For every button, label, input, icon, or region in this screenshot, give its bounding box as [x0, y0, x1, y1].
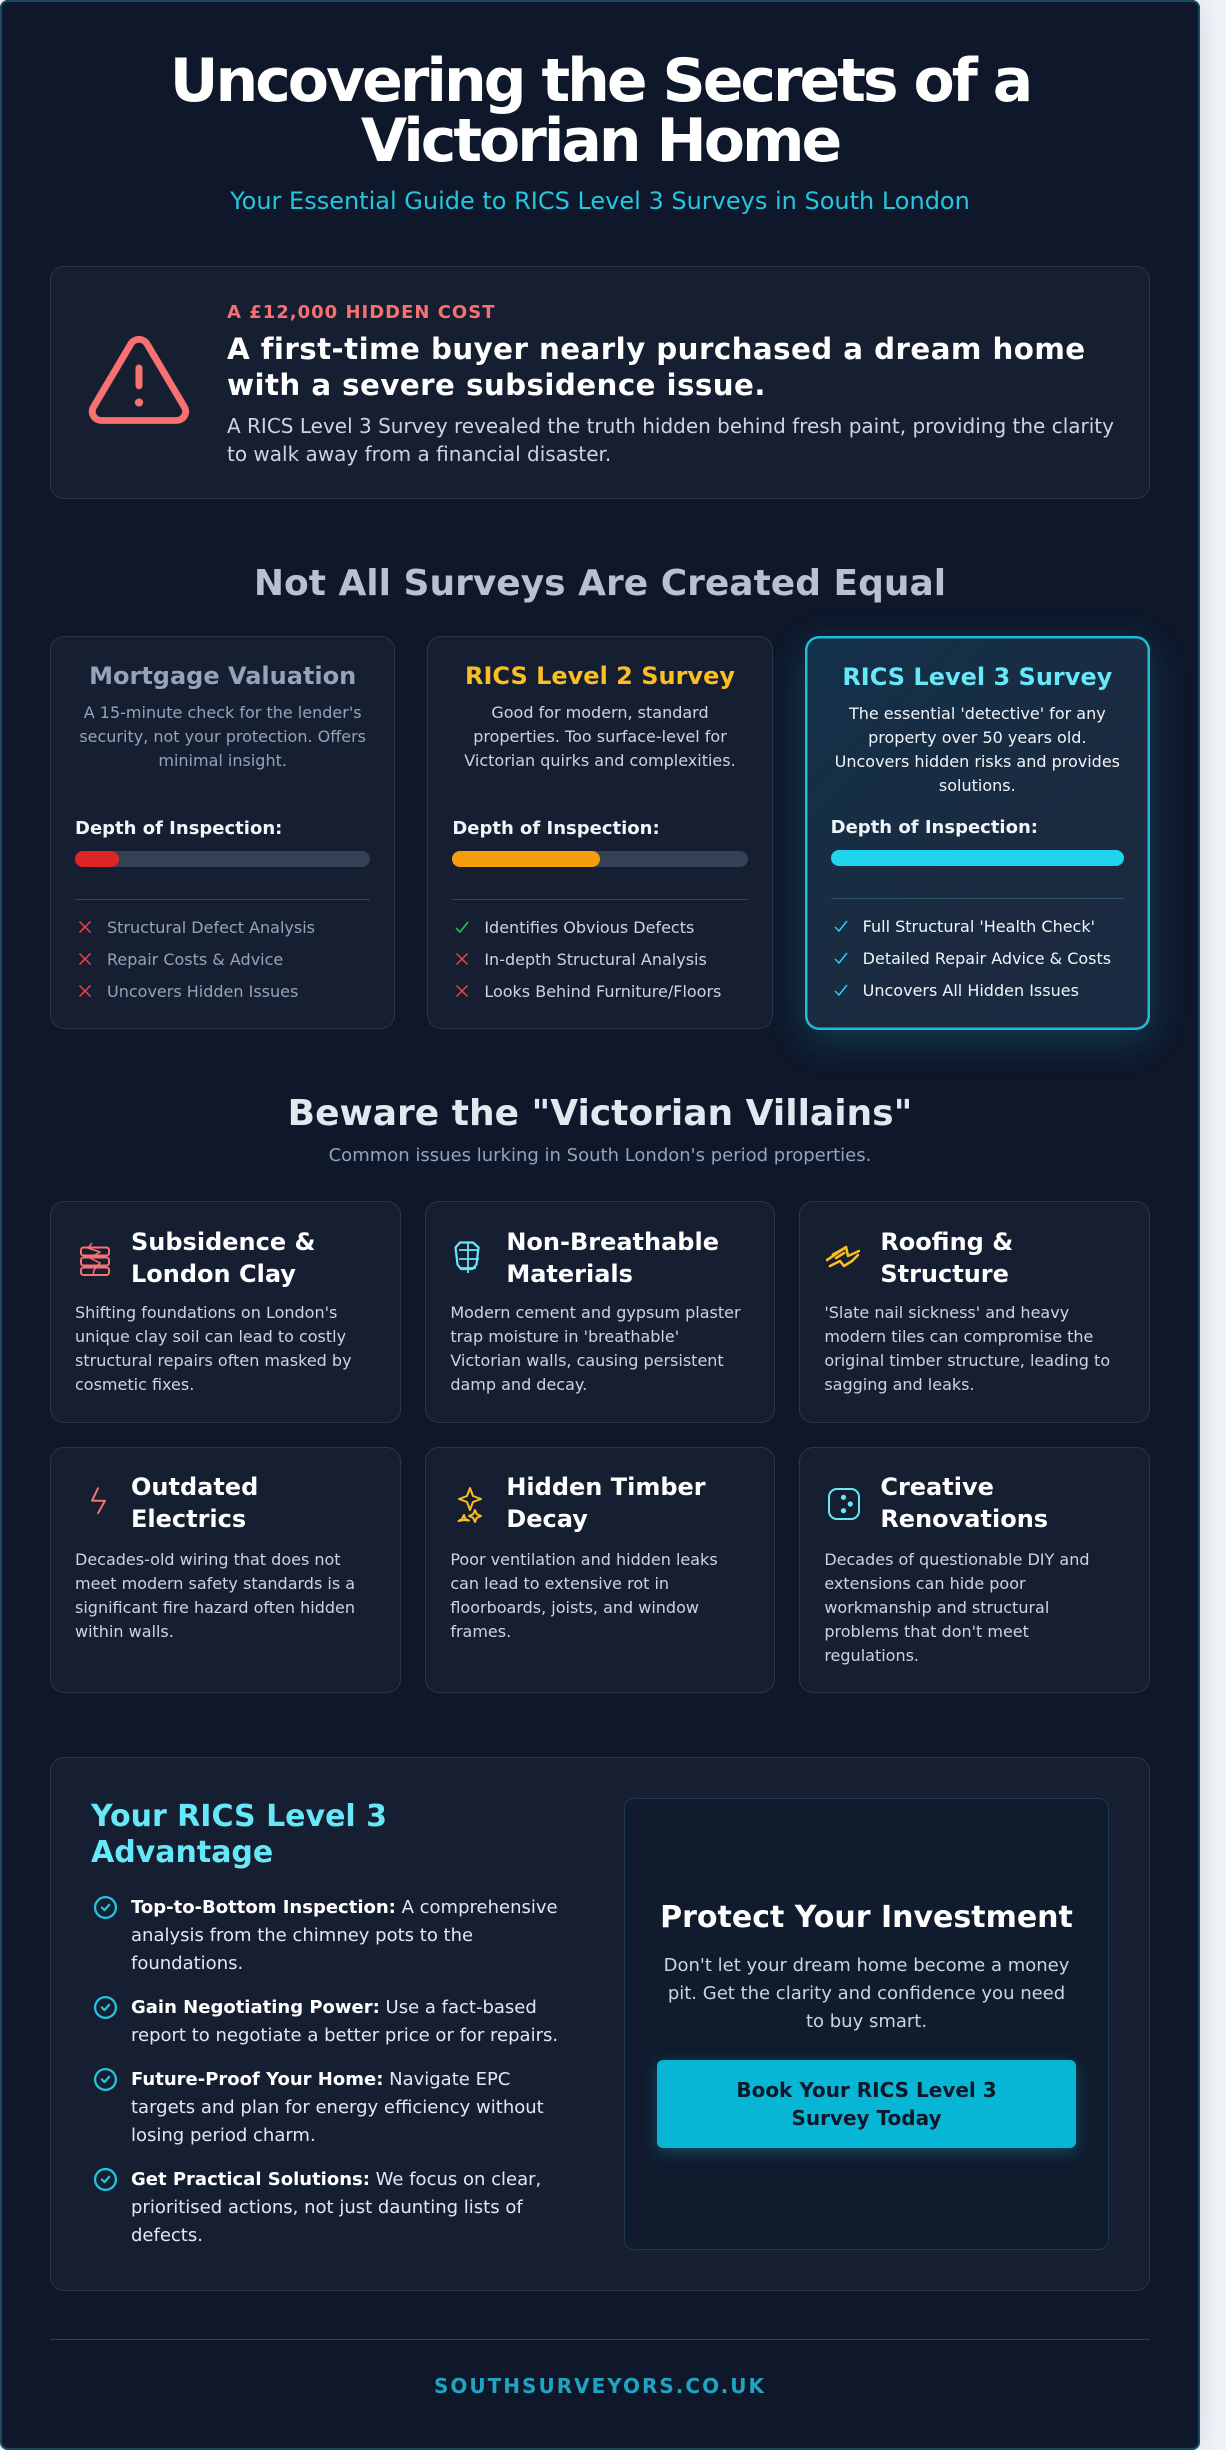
card text: sagging and leaks.	[824, 1375, 975, 1394]
card description: solutions.	[939, 776, 1016, 794]
icon: warning triangle	[88, 336, 190, 424]
card title: Materials	[506, 1260, 633, 1288]
title: Uncovering the Secrets of a	[170, 46, 1030, 116]
icon: check 2	[94, 1996, 118, 2020]
benefit: future proof: losing period charm.	[131, 2125, 316, 2146]
heading: victorian villains: Beware the "Victorian Villains"	[288, 1092, 912, 1134]
card text: significant fire hazard often hidden	[75, 1598, 355, 1616]
benefit: negotiating: report to negotiate a better price or for repairs.	[131, 2025, 558, 2046]
card description: Victorian quirks and complexities.	[464, 750, 736, 770]
feature: obvious defects: Identifies Obvious Defects	[484, 918, 694, 937]
benefit: inspection: foundations.	[131, 1953, 243, 1974]
alert body text: to walk away from a financial disaster.	[227, 442, 611, 466]
card text	[450, 1550, 718, 1640]
advantage heading: Advantage	[91, 1835, 273, 1870]
card text	[75, 1303, 352, 1394]
panel: roofing	[799, 1201, 1150, 1423]
card text	[824, 1550, 1089, 1664]
panel: outdated electrics	[50, 1447, 401, 1693]
card description: Uncovers hidden risks and provides	[835, 752, 1120, 770]
benefit: future proof: targets and plan for energy efficiency without	[131, 2097, 544, 2118]
card text: damp and decay.	[450, 1375, 587, 1394]
card text: frames.	[450, 1622, 511, 1640]
card description: The essential 'detective' for any	[849, 704, 1106, 722]
icon: lightning bolt	[91, 1487, 106, 1514]
icon: check 3	[94, 2068, 118, 2092]
card text: modern tiles can compromise the	[824, 1327, 1093, 1346]
benefit: future proof	[131, 2066, 544, 2150]
cta text: to buy smart.	[806, 2011, 927, 2032]
panel: hidden cost alert	[50, 266, 1150, 499]
card text: workmanship and structural	[824, 1598, 1049, 1616]
depth bar 50%	[452, 851, 748, 867]
card title	[880, 1228, 1013, 1288]
depth bar 100%	[831, 850, 1124, 866]
icon: sparkles	[458, 1487, 482, 1523]
panel: call to action	[624, 1798, 1109, 2250]
card text: regulations.	[824, 1646, 919, 1664]
card title: Mortgage Valuation	[89, 662, 356, 690]
card text: floorboards, joists, and window	[450, 1598, 699, 1616]
card text: meet modern safety standards is a	[75, 1574, 355, 1592]
card text	[824, 1303, 1110, 1394]
icon: dice	[828, 1488, 860, 1520]
depth label: Depth of Inspection:	[831, 817, 1038, 838]
advantage heading: Your RICS Level 3	[91, 1799, 387, 1834]
benefit: practical solutions: Get Practical Solutions: We focus on clear,	[131, 2169, 541, 2190]
icon: roof zigzag	[826, 1246, 860, 1268]
card text: Victorian walls, causing persistent	[450, 1351, 724, 1370]
cta button: Book Your RICS Level 3	[736, 2078, 997, 2102]
cta heading: Protect Your Investment	[660, 1900, 1073, 1935]
depth label: Depth of Inspection:	[75, 818, 282, 838]
card description: properties. Too surface-level for	[473, 726, 727, 746]
card description	[464, 702, 736, 770]
feature: all hidden issues: Uncovers All Hidden Issues	[863, 981, 1079, 1000]
card title: Decay	[506, 1505, 588, 1533]
card text	[75, 1550, 355, 1640]
card text: within walls.	[75, 1622, 174, 1640]
card title: London Clay	[131, 1260, 296, 1288]
card text: Modern cement and gypsum plaster	[450, 1303, 741, 1322]
benefit: practical solutions: defects.	[131, 2225, 203, 2246]
benefit: inspection: analysis from the chimney pots to the	[131, 1925, 473, 1946]
icon: check 1	[94, 1896, 118, 1920]
benefit: inspection	[131, 1897, 558, 1974]
card description: minimal insight.	[158, 750, 287, 770]
panel: level 3 survey highlighted	[805, 636, 1150, 1030]
card title: RICS Level 3 Survey	[842, 663, 1112, 691]
card text: Decades-old wiring that does not	[75, 1550, 341, 1568]
card text: cosmetic fixes.	[75, 1375, 194, 1394]
alert label: A £12,000 HIDDEN COST	[227, 302, 495, 323]
card text	[450, 1303, 741, 1394]
footer website: SOUTHSURVEYORS.CO.UK	[434, 2374, 766, 2398]
card text: problems that don't meet	[824, 1622, 1029, 1640]
cta button	[657, 2060, 1076, 2148]
icon: cracked layers	[80, 1243, 110, 1276]
card title: Renovations	[880, 1505, 1048, 1533]
feature: in-depth analysis: In-depth Structural Analysis	[484, 950, 707, 969]
card text: 'Slate nail sickness' and heavy	[824, 1303, 1069, 1322]
card description: Good for modern, standard	[491, 702, 709, 722]
card title: Structure	[880, 1260, 1009, 1288]
subtitle: Your Essential Guide to RICS Level 3 Surveys in South London	[230, 187, 970, 215]
card text: structural repairs often masked by	[75, 1351, 352, 1370]
card description: property over 50 years old.	[868, 728, 1087, 746]
card text: Shifting foundations on London's	[75, 1303, 337, 1322]
cta text: Don't let your dream home become a money	[664, 1955, 1069, 1976]
panel: subsidence	[50, 1201, 401, 1423]
feature: repair advice: Detailed Repair Advice & Costs	[863, 949, 1111, 968]
card title	[506, 1473, 706, 1533]
alert headline: with a severe subsidence issue.	[227, 368, 766, 402]
card title	[131, 1228, 315, 1288]
card text: unique clay soil can lead to costly	[75, 1327, 346, 1346]
card text: trap moisture in 'breathable'	[450, 1327, 679, 1346]
icon: shield grid	[454, 1241, 480, 1273]
depth bar 15%	[75, 851, 370, 867]
card title	[506, 1228, 719, 1288]
title	[170, 46, 1030, 176]
benefit: negotiating	[131, 1997, 558, 2046]
benefit: future proof: Future-Proof Your Home: Navigate EPC	[131, 2069, 510, 2090]
panel: non-breathable materials	[425, 1201, 775, 1423]
benefit: inspection: Top-to-Bottom Inspection: A comprehensive	[131, 1897, 558, 1918]
advantage heading	[90, 1799, 387, 1870]
panel: level 2 survey	[427, 636, 773, 1029]
card title: Non-Breathable	[506, 1228, 719, 1256]
card title: Creative	[880, 1473, 994, 1501]
feature: behind furniture: Looks Behind Furniture/Floors	[484, 982, 721, 1001]
benefit: negotiating: Gain Negotiating Power: Use a fact-based	[131, 1997, 537, 2018]
panel: advantage section	[50, 1757, 1150, 2291]
villains subheading: Common issues lurking in South London's period properties.	[329, 1145, 871, 1166]
alert body text	[227, 414, 1114, 466]
card title: Outdated	[131, 1473, 258, 1501]
card description	[79, 702, 366, 770]
card title: Hidden Timber	[506, 1473, 706, 1501]
card title	[131, 1473, 258, 1533]
cta button: Survey Today	[791, 2106, 942, 2130]
feature: hidden issues: Uncovers Hidden Issues	[107, 982, 298, 1001]
title: Victorian Home	[361, 106, 839, 176]
feature: health check: Full Structural 'Health Check'	[863, 917, 1095, 936]
feature: structural defect analysis: Structural Defect Analysis	[107, 918, 315, 937]
card description	[835, 704, 1120, 794]
heading: surveys comparison: Not All Surveys Are Created Equal	[254, 563, 946, 604]
depth label: Depth of Inspection:	[452, 818, 660, 838]
card title: Electrics	[131, 1505, 246, 1533]
panel: creative renovations	[799, 1447, 1150, 1693]
card title: Subsidence &	[131, 1228, 315, 1256]
card text: original timber structure, leading to	[824, 1351, 1110, 1370]
card text: Decades of questionable DIY and	[824, 1550, 1089, 1568]
card text: can lead to extensive rot in	[450, 1574, 669, 1592]
benefit: practical solutions: prioritised actions, not just daunting lists of	[131, 2197, 523, 2218]
benefit: practical solutions	[131, 2166, 541, 2250]
panel: mortgage valuation	[50, 636, 395, 1029]
card title: Roofing &	[880, 1228, 1013, 1256]
alert headline: A first-time buyer nearly purchased a dream home	[227, 332, 1086, 366]
card text: extensions can hide poor	[824, 1574, 1026, 1592]
card description: security, not your protection. Offers	[79, 726, 366, 746]
icon: check 4	[92, 2167, 118, 2192]
cta text	[624, 1952, 1109, 2036]
alert headline	[227, 332, 1086, 402]
card title: RICS Level 2 Survey	[465, 662, 735, 690]
cta text: pit. Get the clarity and confidence you need	[668, 1983, 1065, 2004]
panel: hidden timber decay	[425, 1447, 775, 1693]
feature: repair costs: Repair Costs & Advice	[107, 950, 283, 969]
card title	[880, 1473, 1048, 1533]
card description: A 15-minute check for the lender's	[84, 702, 362, 722]
alert body text: A RICS Level 3 Survey revealed the truth hidden behind fresh paint, providing the clarity	[227, 414, 1114, 438]
card text: Poor ventilation and hidden leaks	[450, 1550, 718, 1568]
